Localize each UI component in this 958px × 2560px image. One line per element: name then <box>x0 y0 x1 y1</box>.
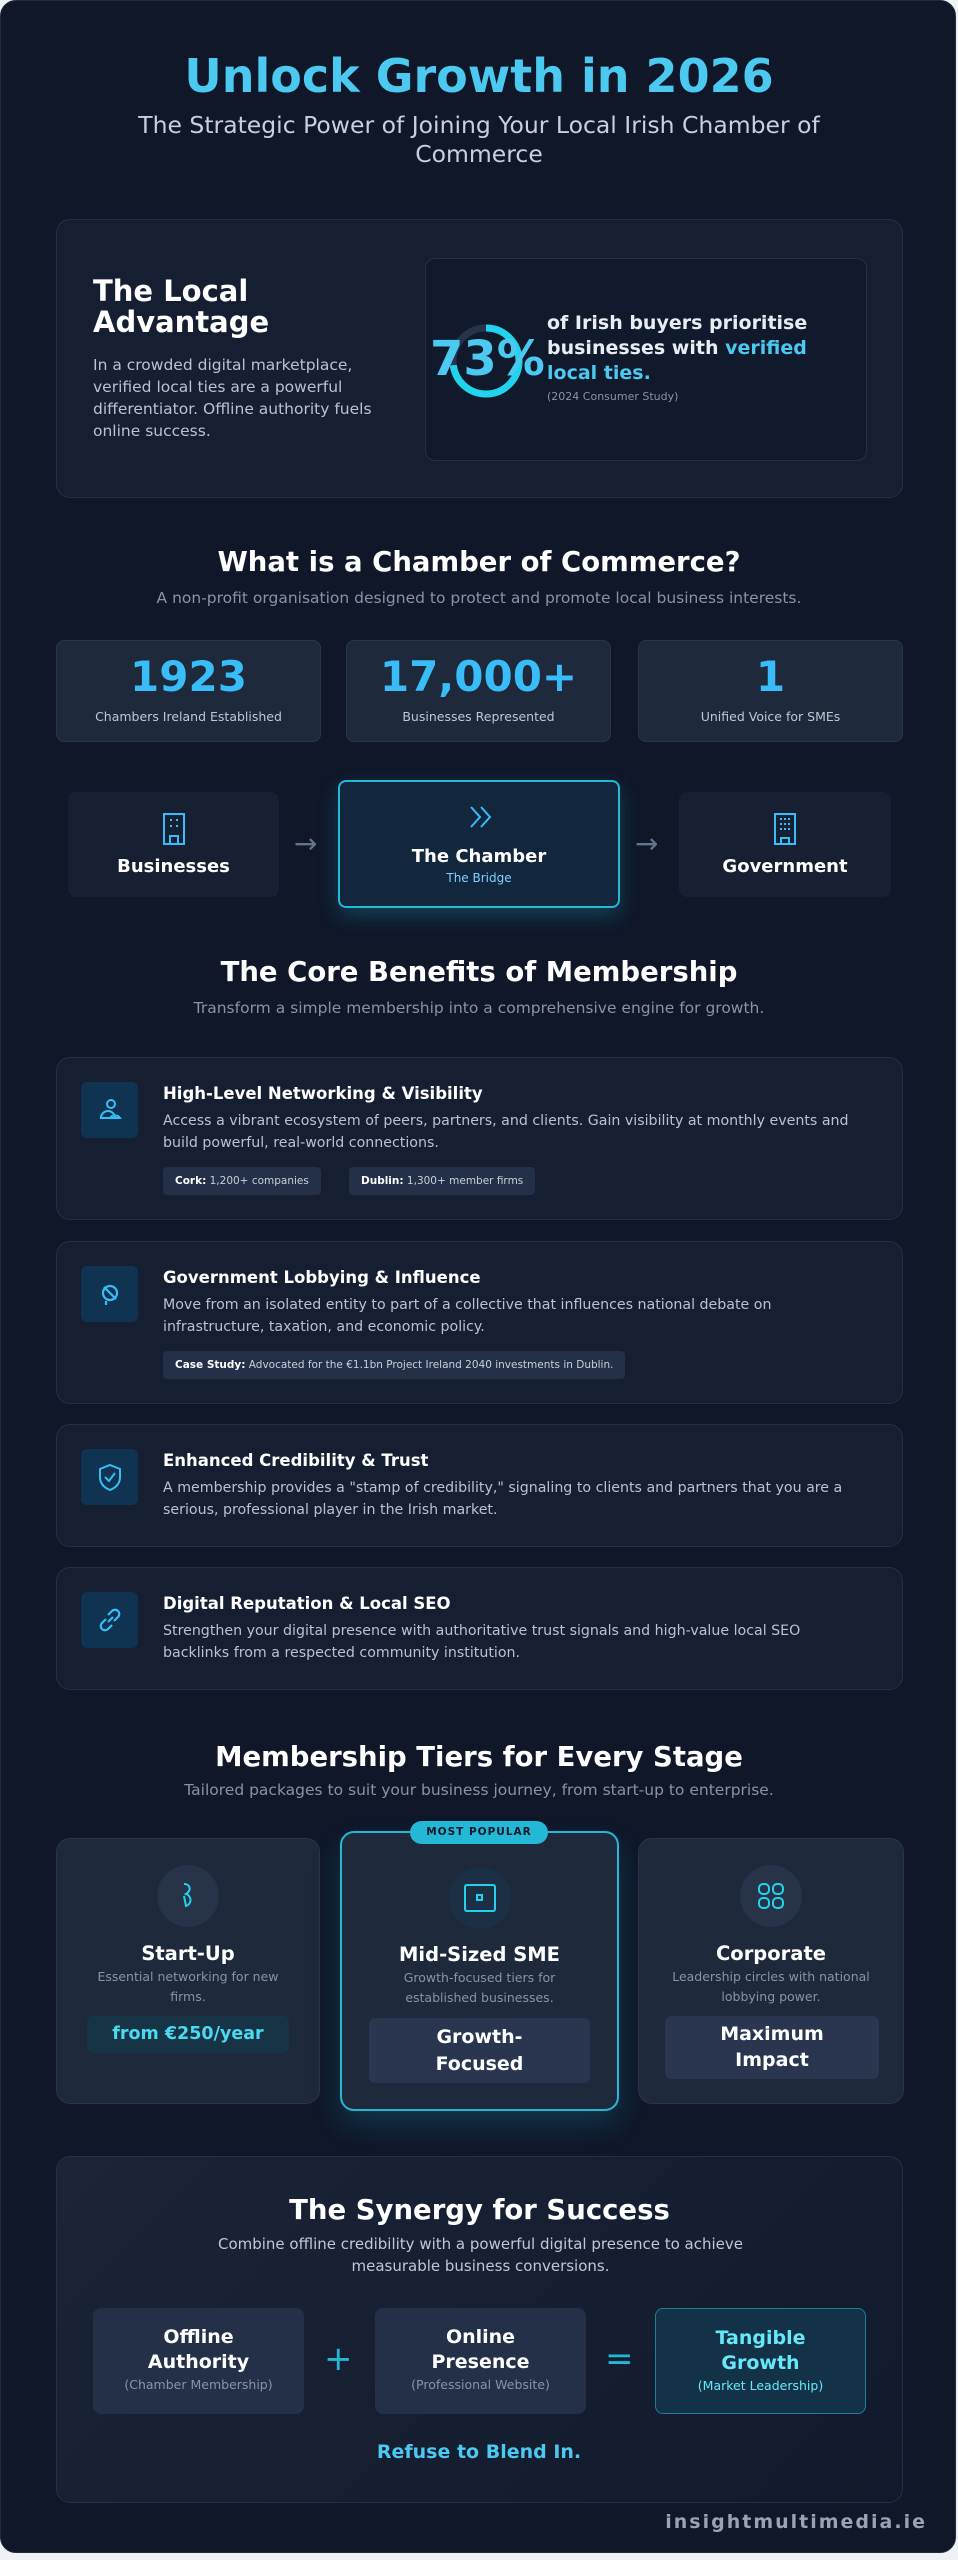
flow: the chamber <box>338 780 620 908</box>
badge: most popular <box>410 1821 548 1844</box>
icon: equals: = <box>605 2339 634 2379</box>
label: growth-focused: Growth- <box>436 2026 523 2048</box>
icon: megaphone <box>81 1266 138 1322</box>
label: maximum impact: Maximum <box>720 2023 824 2045</box>
price <box>87 2016 289 2053</box>
tagline: Refuse to Blend In. <box>377 2441 581 2463</box>
flow: government <box>679 792 891 897</box>
heading: synergy: The Synergy for Success <box>289 2194 670 2226</box>
box: online presence: Presence <box>431 2351 530 2373</box>
stat: 17000: Businesses Represented <box>402 709 555 724</box>
stat: 17000 <box>346 640 611 742</box>
tag: cork: Cork: 1,200+ companies <box>175 1175 309 1187</box>
icon: people <box>81 1082 138 1138</box>
benefit: credibility: Enhanced Credibility & Trust <box>163 1451 428 1470</box>
panel: local advantage <box>56 219 903 498</box>
flow: the chamber: The Chamber <box>412 846 546 867</box>
flow: businesses <box>68 792 279 897</box>
text: stat description: of Irish buyers prioritise businesses with verified local ties. <box>547 312 807 384</box>
tier: start-up: Start-Up <box>141 1942 235 1965</box>
price: from €250/year <box>112 2024 264 2044</box>
icon: link <box>81 1592 138 1648</box>
icon: building <box>163 813 185 845</box>
icon: tablet <box>448 1867 510 1929</box>
flow: government: Government <box>722 856 848 877</box>
subtitle: The Strategic Power of Joining Your Local Irish Chamber of Commerce <box>138 111 820 168</box>
box: offline authority: (Chamber Membership) <box>124 2377 273 2392</box>
box: tangible growth: Tangible <box>716 2327 805 2349</box>
benefit: lobbying: Move from an isolated entity to part of a collective that influences national debate on infrastructure, taxation, and economic policy. <box>163 1297 771 1335</box>
benefit: networking <box>56 1057 903 1220</box>
stat: 1 <box>638 640 903 742</box>
icon: government building <box>774 813 796 845</box>
arrow: → <box>635 827 658 860</box>
arrow: → <box>294 827 317 860</box>
badge: most popular: MOST POPULAR <box>426 1826 532 1838</box>
tag: dublin <box>349 1167 535 1195</box>
heading: membership tiers: Membership Tiers for Every Stage <box>215 1741 743 1773</box>
text: synergy subtitle: Combine offline credibility with a powerful digital presence to achieve measurable business conversions. <box>218 2235 743 2275</box>
benefit: seo: Strengthen your digital presence with authoritative trust signals and high-value local SEO backlinks from a respected community institution. <box>163 1623 800 1661</box>
tier: start-up: Essential networking for new firms. <box>97 1969 279 2004</box>
tag: dublin: Dublin: 1,300+ member firms <box>361 1175 523 1187</box>
chart: ring <box>450 324 522 398</box>
flow: businesses: Businesses <box>117 856 230 877</box>
text: local advantage body: In a crowded digital marketplace, verified local ties are a powerful differentiator. Offline authority fuels online success. <box>93 356 372 440</box>
benefit: lobbying: Government Lobbying & Influence <box>163 1268 481 1287</box>
panel: synergy <box>56 2156 903 2503</box>
tier: start-up <box>56 1838 320 2104</box>
heading: the local advantage: The Local <box>93 274 248 308</box>
flow: the chamber: The Bridge <box>446 871 512 885</box>
label: growth-focused: Focused <box>436 2053 523 2075</box>
tier: corporate: Corporate <box>716 1942 826 1965</box>
stat: 1923 <box>56 640 321 742</box>
stat box: 73% <box>425 258 867 461</box>
box: tangible growth: (Market Leadership) <box>698 2378 823 2393</box>
heading: what is a chamber: What is a Chamber of Commerce? <box>217 546 741 578</box>
label: maximum impact: Impact <box>735 2049 809 2071</box>
text: stat description: (2024 Consumer Study) <box>547 390 678 403</box>
benefit: networking: High-Level Networking & Visibility <box>163 1084 483 1103</box>
tier: mid-sized sme <box>340 1831 619 2111</box>
tier: corporate <box>638 1838 904 2104</box>
icon: rocket <box>157 1865 219 1927</box>
heading: the local advantage: Advantage <box>93 305 269 339</box>
icon: grid <box>740 1865 802 1927</box>
stat: 17000: 17,000+ <box>380 652 577 701</box>
benefit: lobbying <box>56 1241 903 1404</box>
tier: corporate: Leadership circles with national lobbying power. <box>672 1969 870 2004</box>
benefit: networking: Access a vibrant ecosystem of peers, partners, and clients. Gain visibility at monthly events and build powerful, real-world connections. <box>163 1113 849 1151</box>
subheading: A non-profit organisation designed to protect and promote local business interests. <box>157 589 801 607</box>
label: maximum impact <box>665 2016 879 2079</box>
tier: mid-sized sme: Mid-Sized SME <box>399 1943 560 1966</box>
stat: 1923: 1923 <box>130 652 247 701</box>
icon: chevrons <box>470 806 492 828</box>
stat: 1: Unified Voice for SMEs <box>701 709 840 724</box>
benefit: credibility <box>56 1424 903 1547</box>
subheading: Tailored packages to suit your business journey, from start-up to enterprise. <box>184 1781 774 1799</box>
number: 73%: 73% <box>430 331 545 387</box>
icon: plus: + <box>324 2339 352 2379</box>
footer: brand: insightmultimedia.ie <box>665 2511 927 2533</box>
box: online presence: (Professional Website) <box>411 2377 550 2392</box>
subheading: Transform a simple membership into a comprehensive engine for growth. <box>194 999 764 1017</box>
heading: the local advantage <box>93 274 269 339</box>
tag: case study <box>163 1351 625 1379</box>
tier: mid-sized sme: Growth-focused tiers for established businesses. <box>404 1970 555 2005</box>
box: tangible growth: Growth <box>721 2352 800 2374</box>
box: tangible growth <box>655 2308 866 2414</box>
box: offline authority: Authority <box>148 2351 249 2373</box>
benefit: credibility: A membership provides a "stamp of credibility," signaling to clients and partners that you are a serious, professional player in the Irish market. <box>163 1480 842 1518</box>
heading: core benefits: The Core Benefits of Membership <box>221 956 737 988</box>
title: Unlock Growth in 2026 <box>184 49 774 103</box>
tag: case study: Case Study: Advocated for the €1.1bn Project Ireland 2040 investments in Dublin. <box>175 1359 613 1371</box>
stat: 1: 1 <box>756 652 785 701</box>
box: online presence: Online <box>446 2326 515 2348</box>
box: online presence <box>375 2308 586 2414</box>
tag: cork <box>163 1167 321 1195</box>
benefit: seo: Digital Reputation & Local SEO <box>163 1594 451 1613</box>
label: growth-focused <box>369 2018 590 2083</box>
box: offline authority: Offline <box>163 2326 234 2348</box>
benefit: seo <box>56 1567 903 1690</box>
icon: shield <box>81 1449 138 1505</box>
box: offline authority <box>93 2308 304 2414</box>
stat: 1923: Chambers Ireland Established <box>95 709 282 724</box>
